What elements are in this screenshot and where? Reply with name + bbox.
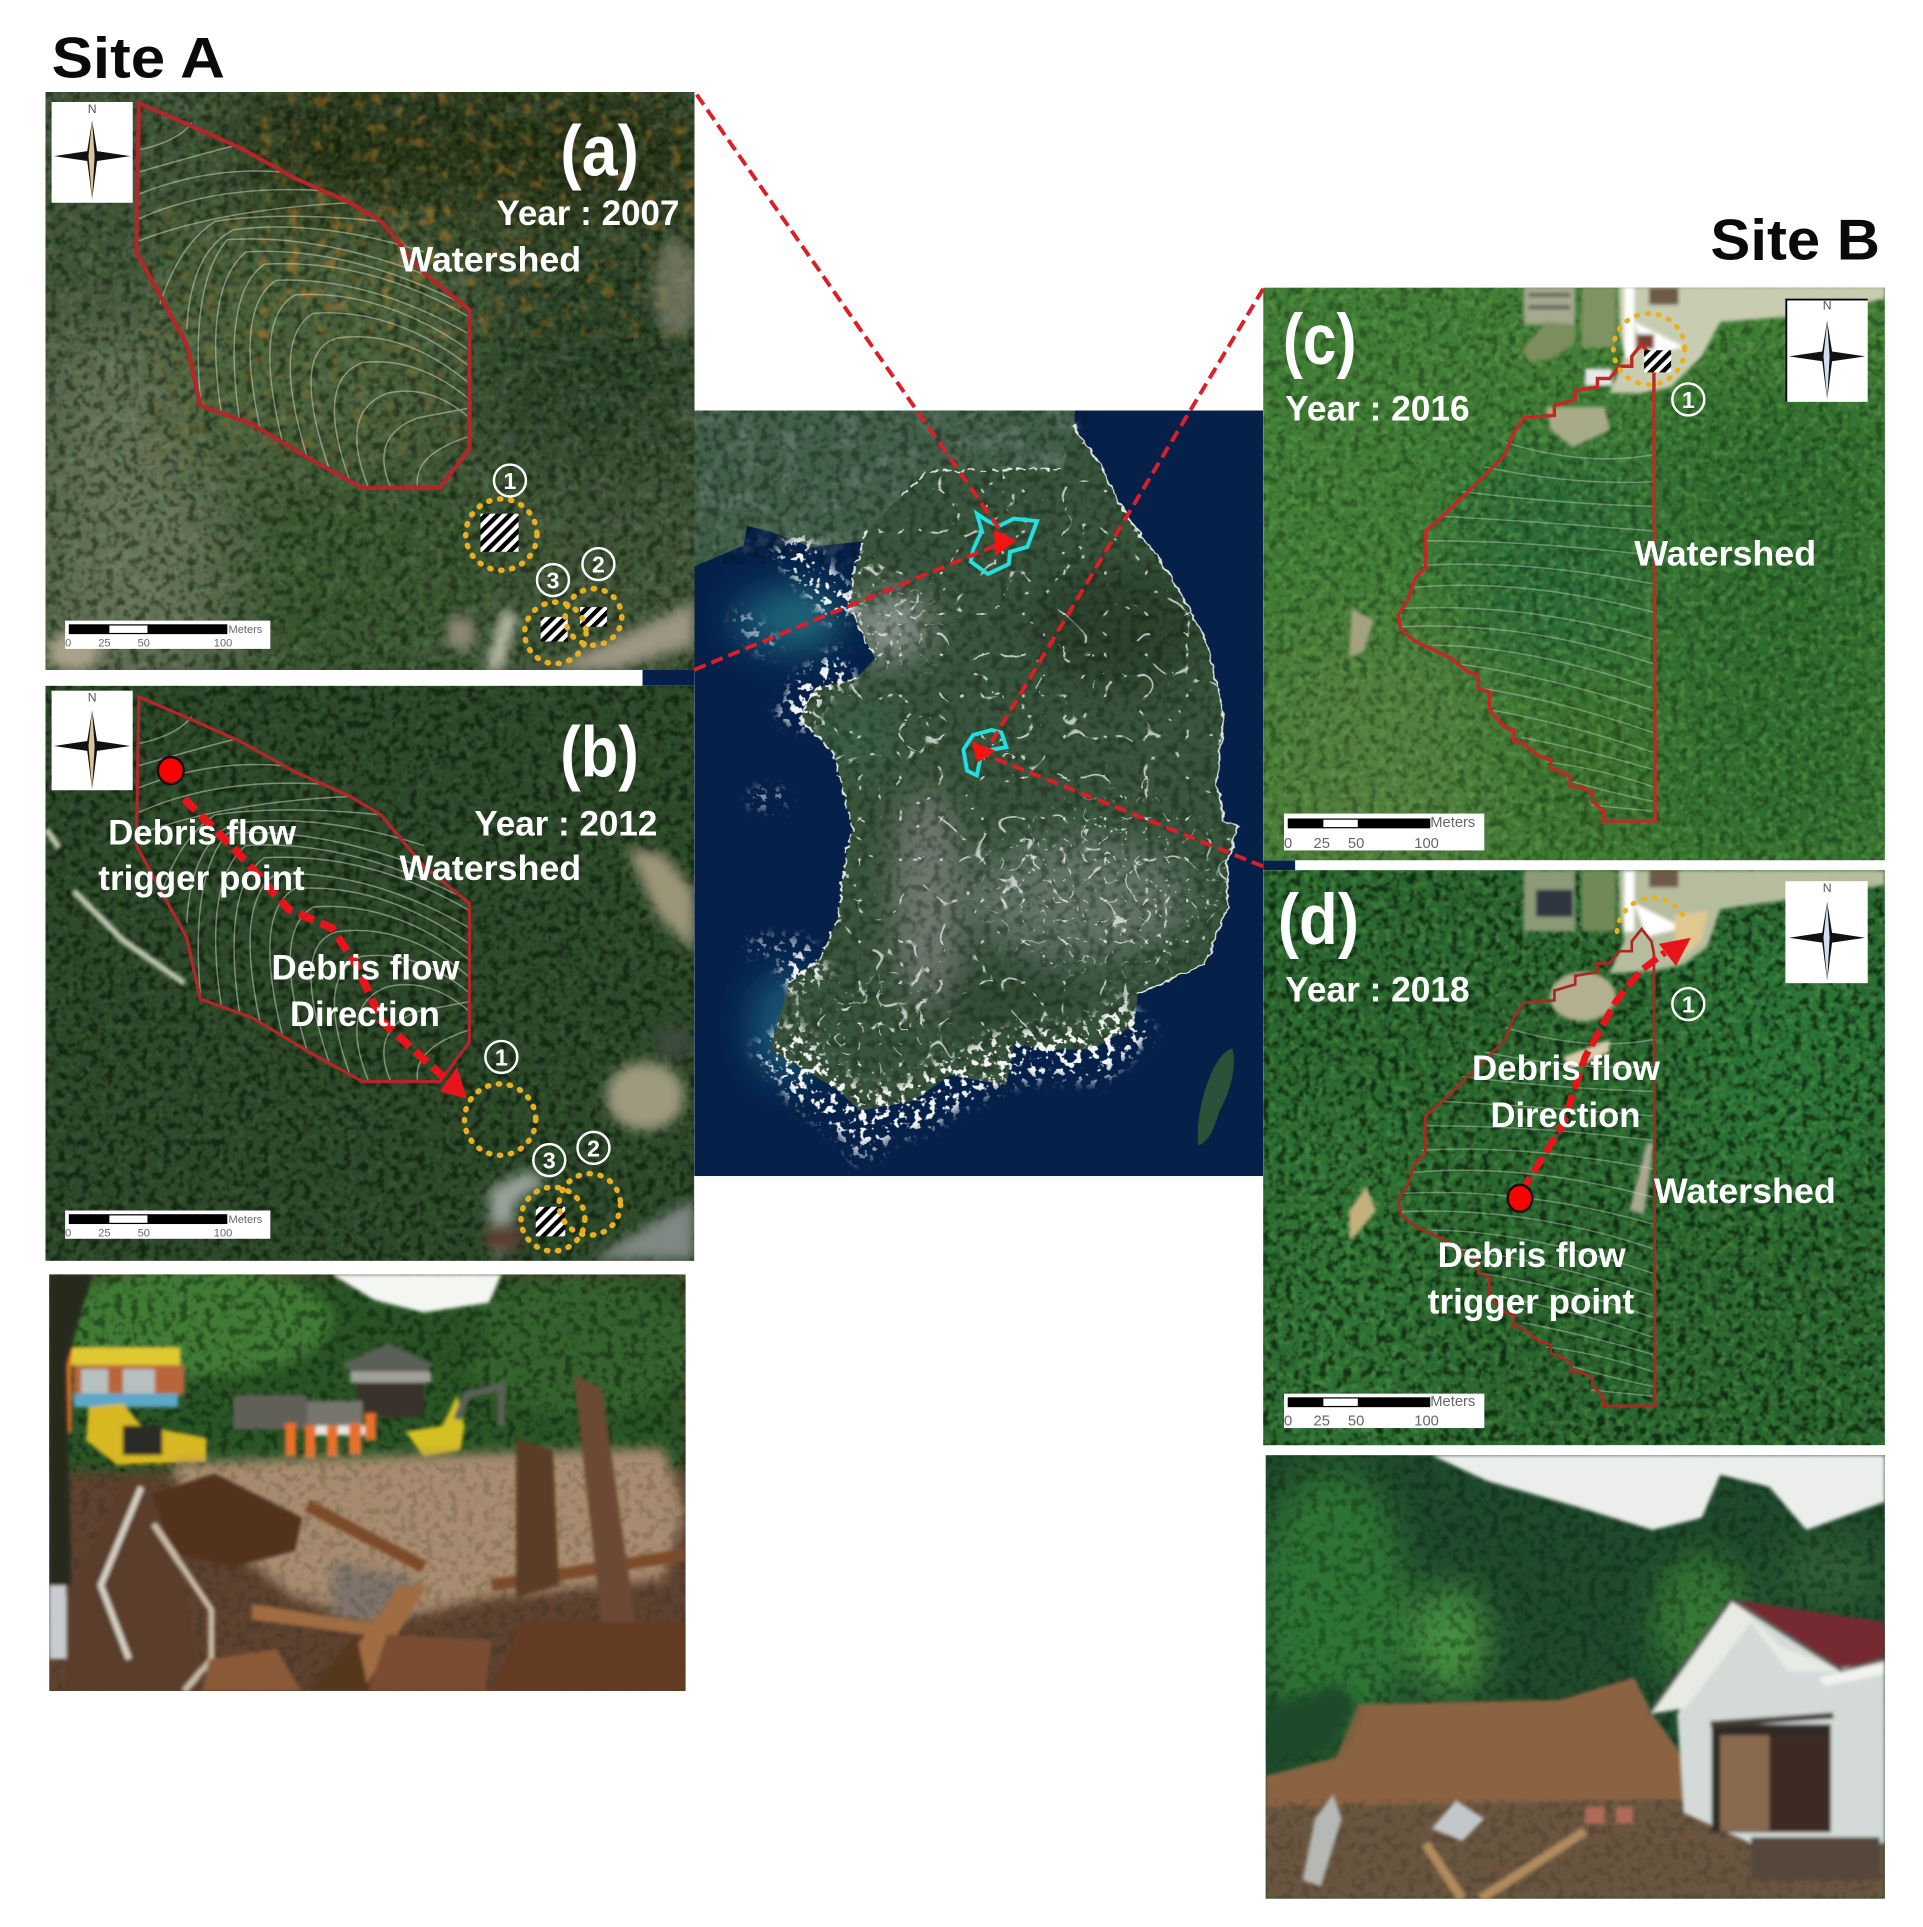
damage sites: 2 bbox=[587, 1135, 600, 1161]
damage sites: 2 bbox=[592, 552, 605, 578]
compass bbox=[52, 691, 133, 790]
debris flow arrow bbox=[184, 799, 467, 1099]
year: Year : 2016 bbox=[1285, 388, 1470, 428]
scale bar: 25 bbox=[98, 1227, 111, 1239]
scale bar: 50 bbox=[1348, 836, 1364, 852]
year: Year : 2018 bbox=[1285, 970, 1470, 1010]
scale bar: 50 bbox=[138, 637, 150, 649]
damage sites bbox=[466, 465, 622, 664]
logging road bbox=[47, 830, 184, 983]
damage sites bbox=[464, 1041, 621, 1251]
North Korea land mass bbox=[694, 410, 1075, 567]
scale bar: 25 bbox=[98, 637, 111, 649]
damage sites: 3 bbox=[546, 568, 559, 594]
damage sites: 1 bbox=[495, 1045, 508, 1071]
contour lines bbox=[1401, 1027, 1653, 1396]
panel letter: (b) bbox=[560, 713, 639, 793]
scale bar: 50 bbox=[138, 1227, 150, 1239]
trigger point label: Debris flow bbox=[108, 812, 296, 852]
panel letter: (d) bbox=[1278, 880, 1359, 960]
panel a: Site A 2007 bbox=[45, 74, 700, 676]
watershed boundary bbox=[136, 697, 469, 1081]
direction label bbox=[272, 947, 460, 1034]
photo: Site B damaged house bbox=[1257, 1455, 1886, 1899]
damage site bbox=[1613, 313, 1704, 415]
trigger point label: trigger point bbox=[98, 858, 305, 898]
direction label bbox=[1472, 1048, 1660, 1135]
scale bar bbox=[1284, 1394, 1484, 1430]
scale bar: Meters bbox=[1430, 815, 1475, 831]
land texture and boundaries bbox=[770, 434, 1235, 1111]
panel c: Site B 2016 bbox=[1263, 286, 1892, 873]
panel d: Site B 2018 bbox=[1263, 870, 1885, 1450]
scale bar: 0 bbox=[1284, 836, 1292, 852]
trigger point label bbox=[98, 812, 305, 898]
damage site: 1 bbox=[1682, 992, 1695, 1018]
watershed boundary bbox=[1398, 344, 1655, 821]
trigger point bbox=[1508, 1185, 1532, 1212]
scale bar: 0 bbox=[65, 1227, 71, 1239]
sky bbox=[1431, 1455, 1885, 1530]
coast outline bbox=[1074, 426, 1239, 994]
scale bar: 100 bbox=[214, 1227, 232, 1239]
panel b: Site A 2012 bbox=[45, 686, 694, 1261]
watershed label: Watershed bbox=[399, 240, 581, 280]
scale bar: 0 bbox=[1284, 1414, 1292, 1430]
contour lines bbox=[139, 716, 469, 1081]
year: Year : 2012 bbox=[474, 804, 657, 844]
damage site bbox=[1617, 898, 1704, 1020]
trigger point label bbox=[1428, 1235, 1634, 1322]
direction label: Direction bbox=[290, 994, 440, 1034]
scale bar: 25 bbox=[1314, 1414, 1330, 1430]
sky bbox=[332, 1274, 501, 1313]
island: Jeju bbox=[1198, 1048, 1234, 1145]
scale bar: 0 bbox=[65, 637, 71, 649]
scale bar: Meters bbox=[229, 624, 263, 636]
watershed label: Watershed bbox=[1634, 533, 1816, 573]
photo: Site A debris damage bbox=[49, 1266, 694, 1691]
panel: satellite map of South Korea bbox=[694, 410, 1263, 1176]
scale bar bbox=[65, 621, 270, 649]
trigger point label: trigger point bbox=[1428, 1282, 1634, 1322]
watershed boundary bbox=[136, 103, 469, 488]
debris flow arrow bbox=[1521, 938, 1691, 1192]
site B region highlight bbox=[963, 730, 1006, 775]
panel letter: (c) bbox=[1283, 300, 1357, 380]
direction label: Debris flow bbox=[1472, 1048, 1660, 1088]
compass: N bbox=[88, 691, 97, 705]
direction label: Direction bbox=[1490, 1095, 1640, 1135]
teal coastal shallows bbox=[731, 586, 842, 1081]
coastal islands bbox=[725, 526, 1162, 1171]
mud flat bbox=[172, 1448, 686, 1622]
scale bar: 100 bbox=[1414, 836, 1439, 852]
connector lines: map to site panels bbox=[694, 95, 1263, 866]
damage site: 1 bbox=[1682, 387, 1695, 413]
watershed label: Watershed bbox=[1654, 1171, 1836, 1211]
strip beneath panel a bbox=[643, 670, 694, 686]
contour lines bbox=[139, 123, 469, 488]
compass: N bbox=[1823, 881, 1832, 895]
scale bar bbox=[65, 1211, 270, 1239]
compass: N bbox=[1823, 299, 1832, 313]
scale bar: 50 bbox=[1348, 1414, 1364, 1430]
scale bar: 25 bbox=[1314, 836, 1330, 852]
direction label: Debris flow bbox=[272, 947, 460, 987]
compass bbox=[52, 102, 133, 203]
scale bar: 100 bbox=[1414, 1414, 1439, 1430]
compass bbox=[1785, 881, 1868, 983]
trigger point bbox=[158, 757, 184, 784]
scale bar: 100 bbox=[214, 637, 232, 649]
contour lines bbox=[1401, 442, 1653, 811]
panel letter: (a) bbox=[560, 112, 639, 192]
scale bar bbox=[1284, 814, 1484, 852]
watershed boundary bbox=[1398, 929, 1655, 1406]
compass: N bbox=[88, 102, 97, 116]
watershed label: Watershed bbox=[399, 848, 581, 888]
heading: Site A: Site A bbox=[52, 26, 225, 90]
site markers bbox=[973, 532, 1014, 761]
year: Year : 2007 bbox=[496, 193, 680, 233]
strip beneath panel c bbox=[1263, 860, 1295, 870]
exposed soil slope bbox=[1266, 1678, 1690, 1843]
trigger point label: Debris flow bbox=[1438, 1235, 1626, 1275]
site A region highlight bbox=[971, 514, 1037, 574]
damage sites: 3 bbox=[543, 1148, 556, 1174]
South Korea land bbox=[770, 426, 1239, 1111]
heading: Site B: Site B bbox=[1710, 208, 1880, 272]
debris foreground bbox=[1266, 1799, 1885, 1899]
scale bar: Meters bbox=[1430, 1394, 1475, 1410]
compass bbox=[1785, 299, 1868, 402]
scale bar: Meters bbox=[229, 1214, 263, 1226]
damage sites: 1 bbox=[503, 468, 516, 494]
house bbox=[1677, 1600, 1885, 1843]
